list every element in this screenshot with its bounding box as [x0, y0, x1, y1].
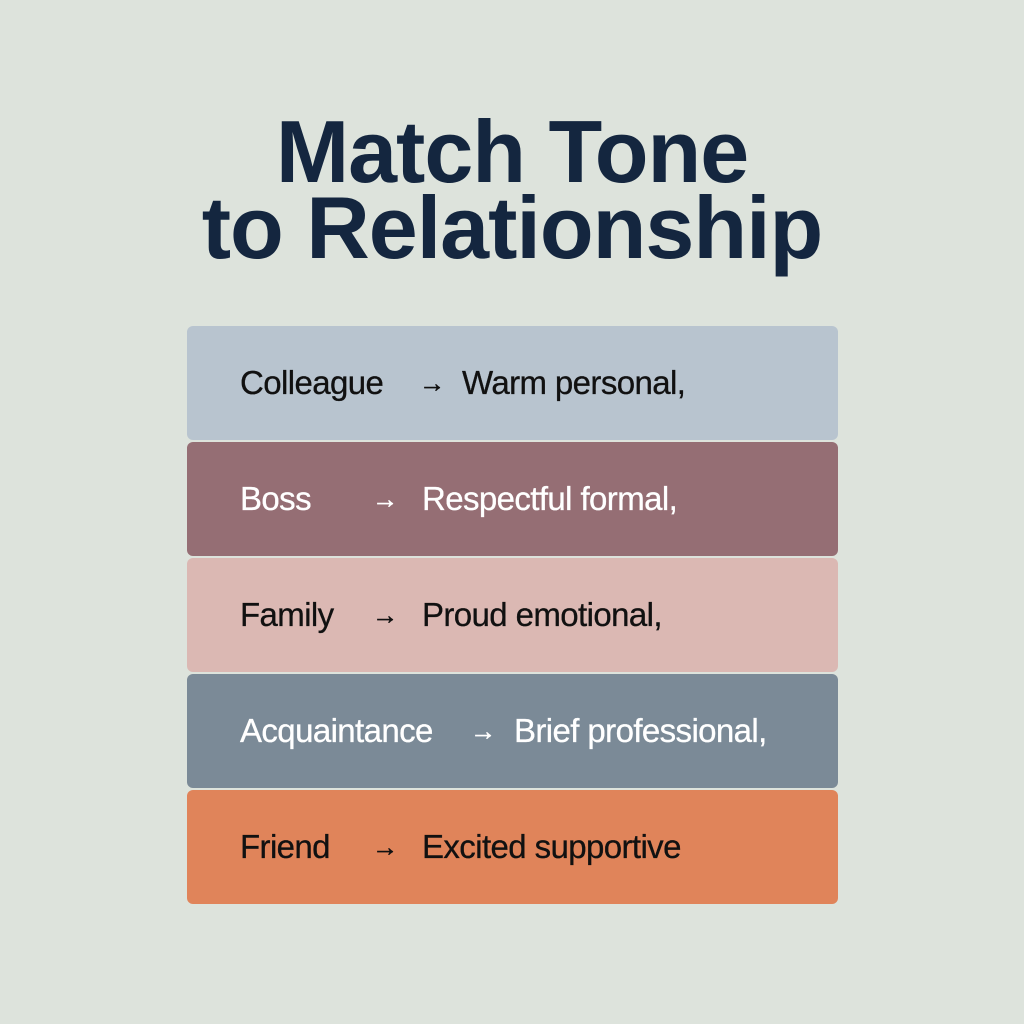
row: friend: Excited supportive: [422, 828, 681, 865]
row: family: [187, 558, 838, 672]
title: [202, 102, 822, 277]
row: boss: Respectful formal,: [422, 480, 677, 517]
row: colleague: Colleague: [240, 364, 383, 401]
title: to Relationship: [202, 178, 822, 277]
row: acquaintance: Brief professional,: [514, 712, 767, 749]
row: acquaintance: [187, 674, 838, 788]
list of relationship rows: [187, 326, 838, 904]
row: boss: →: [372, 484, 397, 514]
row: friend: [187, 790, 838, 904]
row: colleague: [187, 326, 838, 440]
row: boss: Boss: [240, 480, 311, 517]
row: family: Proud emotional,: [422, 596, 662, 633]
row: friend: →: [372, 832, 397, 862]
row: acquaintance: Acquaintance: [240, 712, 433, 749]
row: family: Family: [240, 596, 334, 633]
row: friend: Friend: [240, 828, 330, 865]
row: boss: [187, 442, 838, 556]
row: colleague: Warm personal,: [462, 364, 685, 401]
row: acquaintance: →: [470, 716, 495, 746]
row: family: →: [372, 600, 397, 630]
row: colleague: →: [419, 368, 444, 398]
title: Match Tone: [276, 102, 748, 201]
